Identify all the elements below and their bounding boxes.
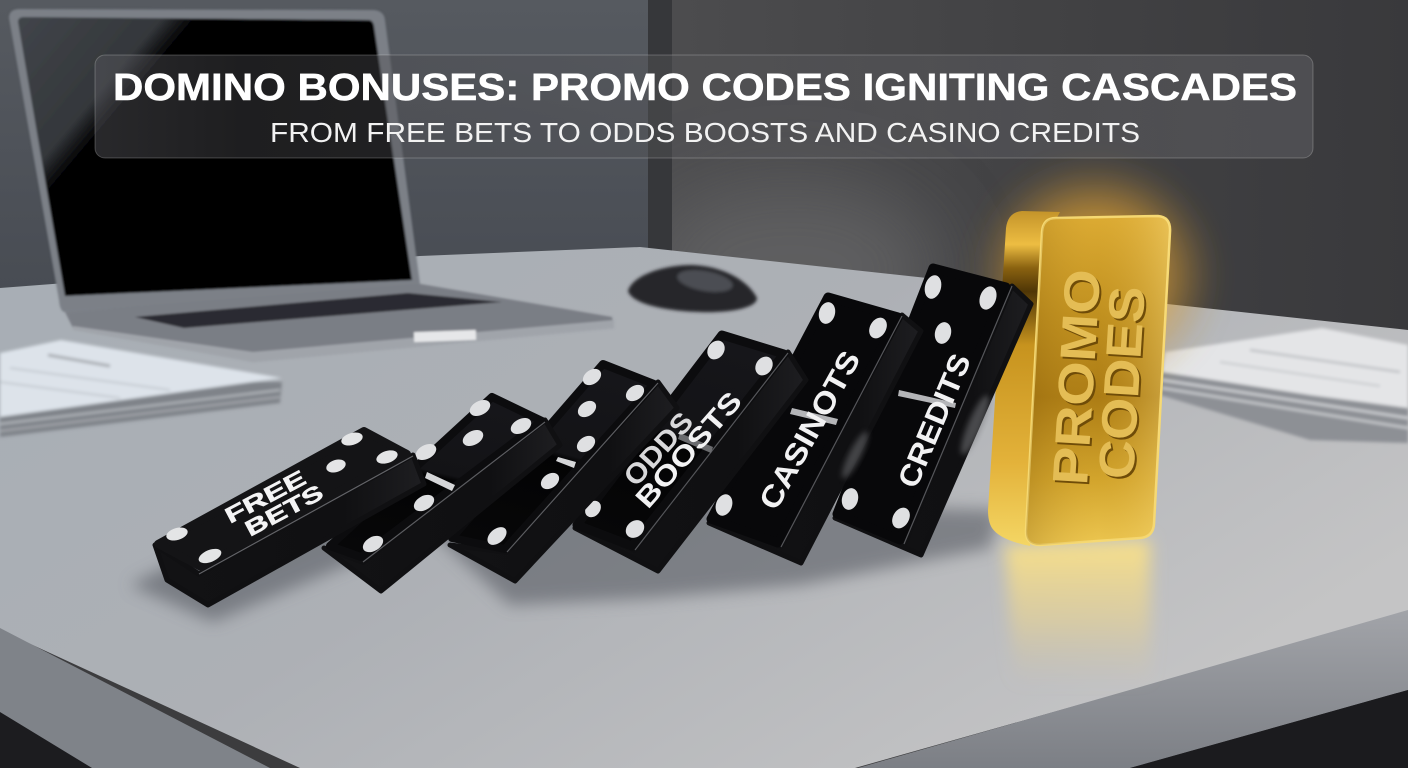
title panel xyxy=(95,55,1313,158)
odds boosts label: BOOSTS xyxy=(629,386,748,514)
gold block face xyxy=(1026,216,1170,545)
credits label: CREDITS xyxy=(892,349,978,493)
gold glow xyxy=(970,155,1220,395)
gold promo codes block xyxy=(988,211,1170,546)
gold label shadow xyxy=(1044,270,1158,489)
gold label: CODES xyxy=(1088,285,1156,481)
gold label: PROMO xyxy=(1042,268,1111,487)
casinots label: CASINOTS xyxy=(753,345,867,515)
papers right xyxy=(1160,328,1408,443)
gold reflection xyxy=(1005,540,1150,685)
title: DOMINO BONUSES: PROMO CODES IGNITING CASCADES xyxy=(113,67,1297,109)
gold label xyxy=(1042,268,1156,487)
domino: blank two xyxy=(324,397,560,591)
odds boosts label xyxy=(617,386,748,514)
desk xyxy=(0,247,1408,768)
gold label shadow: PROMO xyxy=(1044,270,1113,489)
mouse xyxy=(628,265,757,312)
papers left xyxy=(0,340,282,437)
domino: blank three xyxy=(450,364,677,581)
subtitle: FROM FREE BETS TO ODDS BOOSTS AND CASINO CREDITS xyxy=(270,117,1140,148)
domino: odds boosts xyxy=(575,335,806,571)
gold label shadow: CODES xyxy=(1090,287,1158,483)
free bets label: BETS xyxy=(241,479,327,541)
gold block side xyxy=(988,211,1060,546)
laptop screen xyxy=(9,9,420,312)
background wall xyxy=(0,0,998,288)
laptop xyxy=(9,9,614,362)
free bets label: FREE xyxy=(221,465,310,528)
domino: credits xyxy=(835,268,1031,555)
domino: casino xyxy=(709,297,921,563)
domino: free bets xyxy=(155,430,424,605)
domino shadow xyxy=(130,500,1000,622)
laptop base xyxy=(65,283,614,362)
odds boosts label: ODDS xyxy=(617,406,699,492)
free bets label xyxy=(221,465,327,541)
